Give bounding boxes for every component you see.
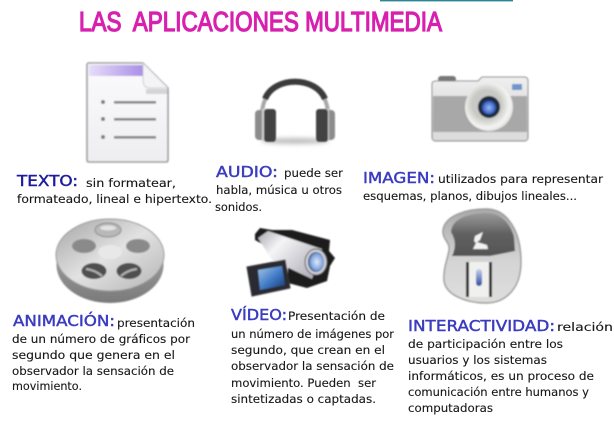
icon: text document — [87, 63, 168, 162]
text block: VÍDEO — [231, 305, 394, 406]
text block: AUDIO: sonidos. — [215, 200, 262, 214]
text block: ANIMACIÓN: observador la sensación de — [12, 364, 174, 378]
text block: IMAGEN — [363, 169, 603, 203]
text block: AUDIO: puede ser — [284, 166, 343, 180]
text block: TEXTO: sin formatear, — [86, 176, 176, 190]
text block: INTERACTIVIDAD: de participación entre los — [408, 337, 563, 351]
text block: VÍDEO: VÍDEO: — [231, 305, 287, 324]
text block: INTERACTIVIDAD: computadoras — [408, 401, 493, 415]
text block: ANIMACIÓN: movimiento. — [12, 379, 82, 393]
text block: INTERACTIVIDAD: usuarios y los sistemas — [408, 353, 547, 367]
text block: ANIMACIÓN — [12, 311, 195, 393]
title: LAS APLICACIONES MULTIMEDIA — [79, 6, 442, 37]
text block: IMAGEN: esquemas, planos, dibujos lineales... — [363, 189, 577, 203]
text block: TEXTO: formateado, lineal e hipertexto. — [17, 192, 212, 206]
text block: INTERACTIVIDAD — [408, 317, 613, 415]
icon: computer mouse — [443, 209, 521, 303]
text block: VÍDEO: segundo, que crean en el — [231, 343, 385, 357]
text block: IMAGEN: IMAGEN: — [363, 169, 435, 187]
text block: VÍDEO: un número de imágenes por — [231, 327, 394, 341]
icon: photo camera — [432, 76, 528, 141]
text block: INTERACTIVIDAD: informáticos, es un proceso de — [408, 369, 594, 383]
icon: video camera — [247, 228, 335, 296]
text block: ANIMACIÓN: segundo que genera en el — [12, 348, 175, 362]
text block: IMAGEN: utilizados para representar — [438, 172, 603, 186]
text block: VÍDEO: sintetizadas o captadas. — [231, 392, 376, 406]
top edge bar — [380, 0, 513, 1]
text block: AUDIO: habla, música u otros — [216, 183, 342, 197]
text block: VÍDEO: observador la sensación de — [231, 359, 394, 373]
text block: ANIMACIÓN: presentación — [117, 316, 195, 330]
text block: AUDIO — [215, 163, 343, 214]
text block: AUDIO: AUDIO: — [216, 163, 278, 181]
text block: ANIMACIÓN: ANIMACIÓN: — [13, 311, 115, 330]
text block: TEXTO: TEXTO: — [16, 172, 78, 190]
text block: INTERACTIVIDAD: INTERACTIVIDAD: — [408, 317, 555, 335]
text block: VÍDEO: movimiento. Pueden ser — [231, 376, 376, 390]
text block: INTERACTIVIDAD: relación — [557, 320, 613, 334]
icon: film reel — [56, 219, 164, 303]
text block: TEXTO — [16, 172, 212, 206]
text block: VÍDEO: Presentación de — [288, 309, 385, 323]
icon: headphones — [255, 80, 335, 144]
text block: ANIMACIÓN: de un número de gráficos por — [12, 332, 190, 346]
text block: INTERACTIVIDAD: comunicación entre humanos y — [408, 385, 589, 399]
